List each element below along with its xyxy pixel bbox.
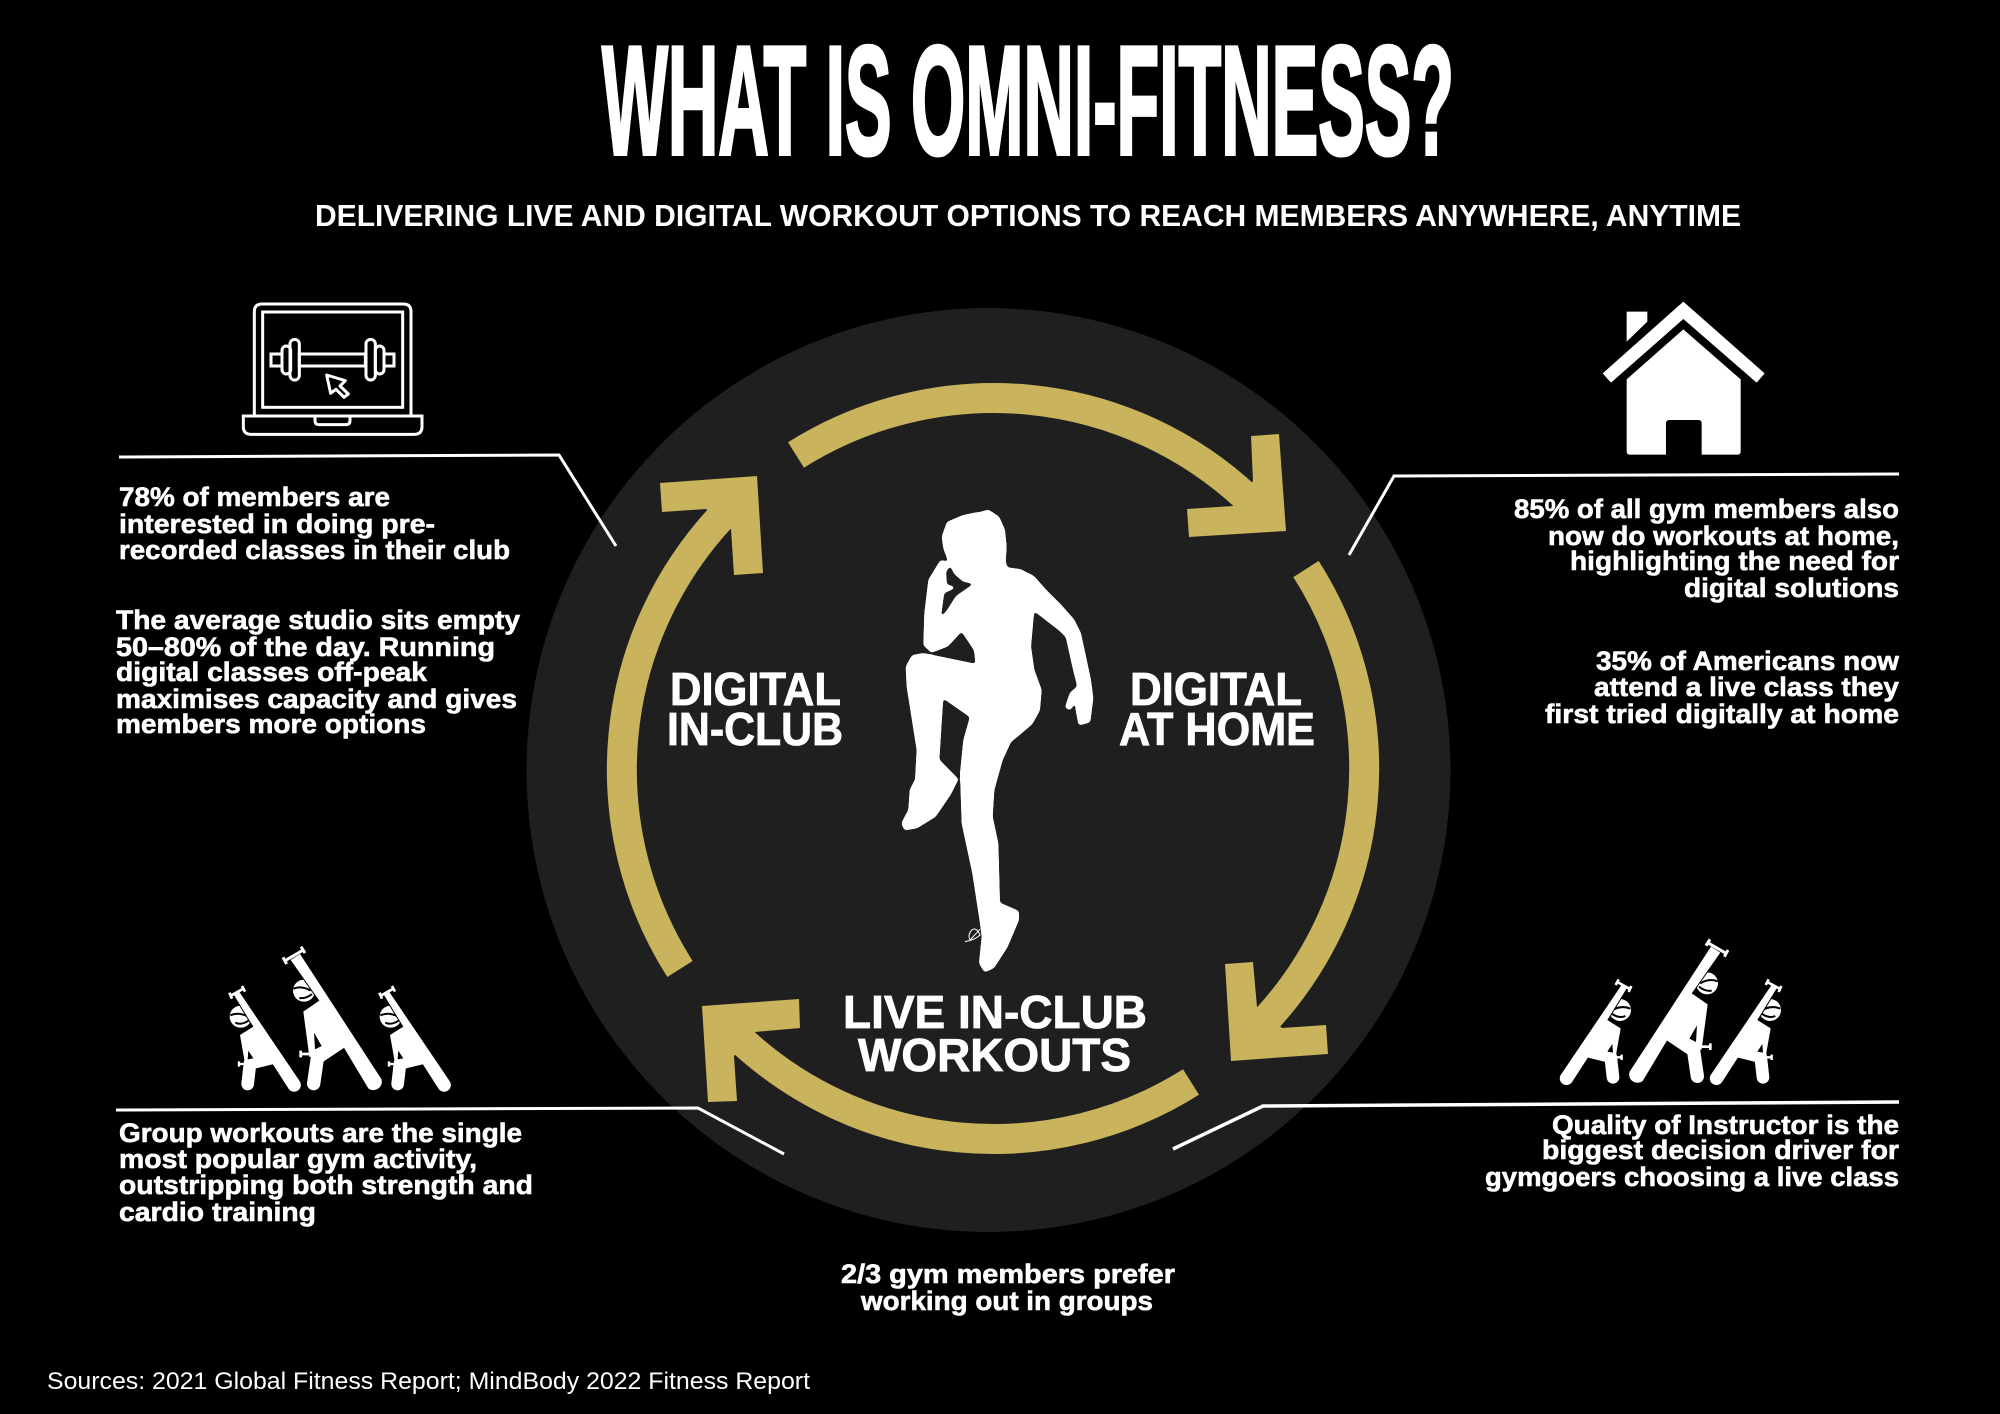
connector line: top right (1349, 474, 1899, 555)
text: group preference stat (841, 1259, 1175, 1316)
label: live in-club workouts: WORKOUTS (858, 1029, 1131, 1081)
text: quality of instructor stat: biggest decision driver for (1542, 1135, 1899, 1165)
arrow: right, digital at home to live in-club (1225, 569, 1364, 1061)
text: pre-recorded classes stat (119, 482, 510, 565)
icon: group workout, right (1560, 939, 1781, 1085)
icon: group workout, left (229, 947, 451, 1092)
text: pre-recorded classes stat: 78% of members are (119, 482, 390, 512)
icon: house (1603, 302, 1765, 455)
text: empty studio stat: The average studio sits empty (116, 605, 520, 635)
text: home workouts stat: highlighting the need for (1570, 546, 1899, 576)
text: live class stat: first tried digitally at home (1545, 699, 1899, 729)
label: digital in-club: IN-CLUB (667, 703, 843, 755)
connector line: top left (119, 455, 616, 546)
icon: athlete silhouette (902, 511, 1092, 971)
label: digital at home (1119, 663, 1315, 755)
text: empty studio stat: maximises capacity and gives (116, 684, 517, 714)
text: pre-recorded classes stat: recorded classes in their club (119, 535, 510, 565)
connector line: bottom left (116, 1108, 784, 1154)
text: quality of instructor stat (1485, 1110, 1899, 1192)
text: group workouts stat: most popular gym activity, (119, 1144, 477, 1174)
text: quality of instructor stat: gymgoers choosing a live class (1485, 1162, 1899, 1192)
label: live in-club workouts (843, 986, 1147, 1081)
text: group preference stat: 2/3 gym members prefer (841, 1259, 1175, 1289)
text: group preference stat: working out in groups (860, 1286, 1153, 1316)
label: live in-club workouts: LIVE IN-CLUB (843, 986, 1147, 1038)
text: home workouts stat: 85% of all gym members also (1514, 494, 1899, 524)
text: quality of instructor stat: Quality of Instructor is the (1552, 1110, 1899, 1140)
text: home workouts stat: digital solutions (1684, 573, 1899, 603)
label: digital in-club: DIGITAL (670, 663, 841, 715)
text: home workouts stat: now do workouts at home, (1548, 521, 1899, 551)
arrow: left, digital in-club loop (622, 476, 763, 969)
subtitle: DELIVERING LIVE AND DIGITAL WORKOUT OPTIONS TO REACH MEMBERS ANYWHERE, ANYTIME (315, 198, 1741, 233)
text: empty studio stat: members more options (116, 709, 426, 739)
connector line: bottom right (1173, 1102, 1899, 1149)
sources: Sources: 2021 Global Fitness Report; MindBody 2022 Fitness Report (47, 1368, 810, 1395)
text: group workouts stat: cardio training (119, 1197, 316, 1227)
arrow: bottom, live in-club to digital in-club (702, 999, 1191, 1139)
text: empty studio stat: digital classes off-peak (116, 657, 427, 687)
text: group workouts stat: outstripping both strength and (119, 1170, 533, 1200)
text: live class stat: 35% of Americans now (1596, 646, 1899, 676)
text: live class stat: attend a live class they (1594, 672, 1899, 702)
icon: laptop with barbell (243, 304, 422, 434)
text: home workouts stat (1514, 494, 1899, 603)
text: group workouts stat: Group workouts are the single (119, 1118, 522, 1148)
text: live class stat (1545, 646, 1899, 729)
text: empty studio stat (116, 605, 520, 739)
arrow: top, digital in-club to digital at home (796, 398, 1286, 537)
text: pre-recorded classes stat: interested in doing pre- (119, 509, 435, 539)
central dark circle (526, 308, 1450, 1232)
label: digital at home: DIGITAL (1130, 663, 1302, 715)
text: group workouts stat (119, 1118, 533, 1227)
text: empty studio stat: 50–80% of the day. Running (116, 632, 495, 662)
label: digital at home: AT HOME (1119, 703, 1315, 755)
label: digital in-club (667, 663, 843, 755)
